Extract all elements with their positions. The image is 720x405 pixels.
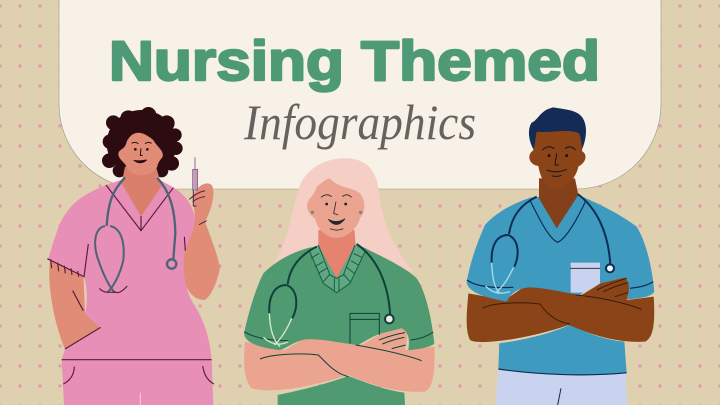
subtitle: Infographics [243,94,476,150]
syringe [193,157,198,206]
scrubs top [467,195,654,302]
panel: title card [59,0,661,189]
figure: nurse in green scrubs [244,158,435,405]
facial features [132,142,152,163]
stethoscope [263,244,394,347]
facial features [542,147,576,176]
arms [467,277,654,342]
face [529,131,586,188]
hair [529,107,586,152]
earrings [311,211,362,214]
lower scrubs [278,376,405,405]
fingers [189,191,207,225]
stethoscope [95,177,176,293]
facial features [321,195,352,230]
scrubs top [244,245,434,350]
trousers [496,367,627,405]
title: Themed [361,29,600,92]
arm lines [483,278,642,405]
neck [539,178,578,228]
scrubs top and trousers [48,179,213,405]
sleeve seams and arm lines [244,332,433,377]
lower scrubs [498,325,627,375]
long hair [273,158,413,272]
collar [309,245,365,293]
uniform seams [47,185,214,384]
right arm and hand [183,183,220,300]
collar and seams [467,201,653,375]
stethoscope [486,194,614,293]
face [307,178,364,238]
title: Nursing [109,29,344,92]
hair [102,107,183,177]
pocket [350,313,379,343]
neck [318,230,356,278]
face [118,133,163,175]
trouser centre seam [139,393,142,405]
figure: nurse in pink scrubs [47,107,220,405]
left arm [49,260,101,349]
pocket card [571,263,600,293]
figure: nurse in blue scrubs [467,107,654,405]
title [109,29,600,92]
neck and chest [122,167,162,217]
arms [244,328,435,392]
